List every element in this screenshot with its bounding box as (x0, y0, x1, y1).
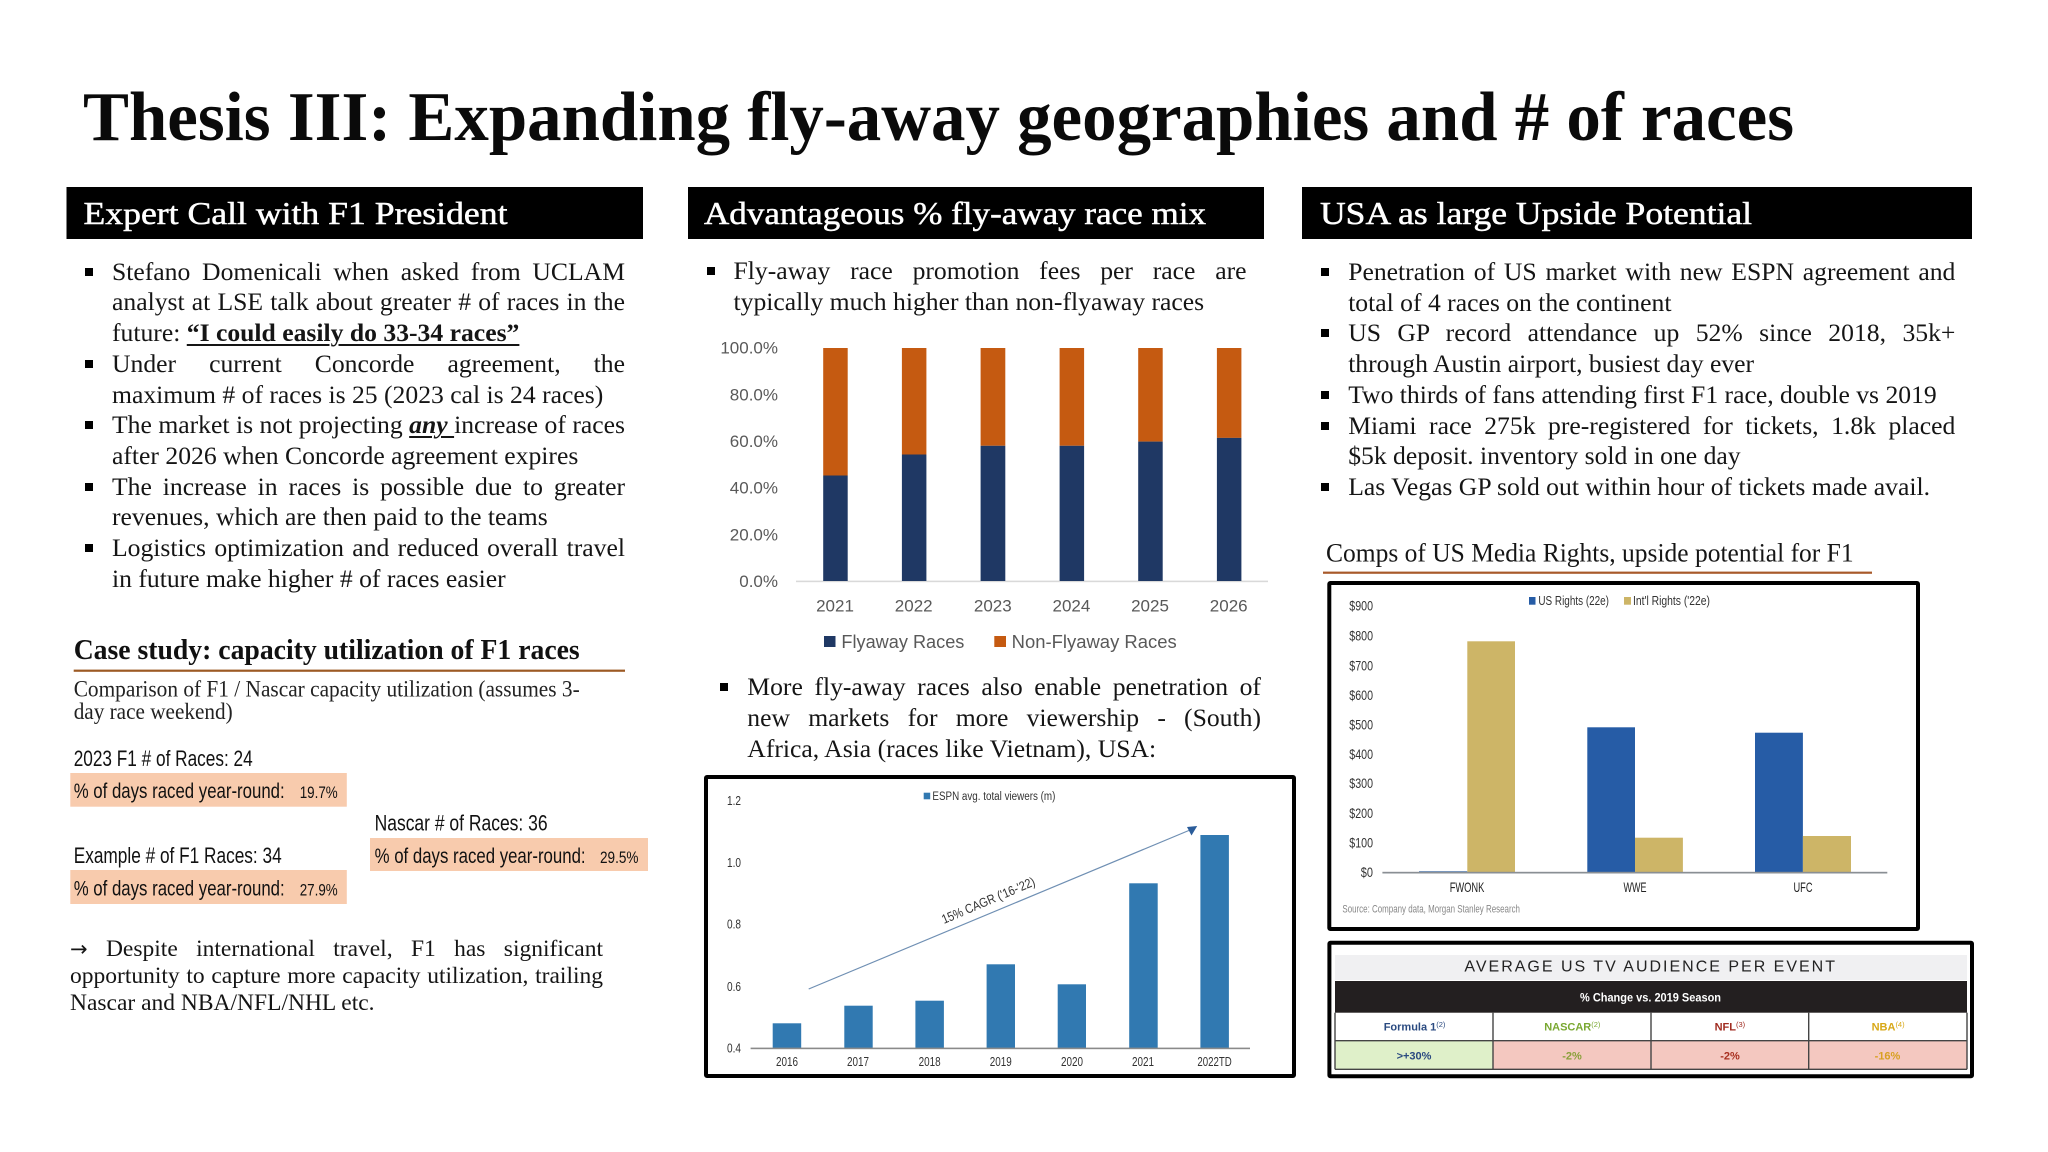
y axis labels: 1.0 (727, 856, 741, 870)
panel heading: USA as large Upside Potential: USA as large Upside Potential (1320, 195, 1752, 231)
y axis labels: $500 (1349, 716, 1373, 732)
panel heading: Expert Call with F1 President (66, 187, 643, 239)
x axis labels: 2020 (1061, 1055, 1083, 1069)
values: -2% (1720, 1050, 1740, 1062)
text block: expert call bullets: analyst at LSE talk about greater # of races in the (112, 287, 625, 316)
callout: capacity utilization conclusion (70, 936, 603, 1016)
panel heading: Advantageous % fly-away race mix (688, 187, 1264, 239)
x axis labels (816, 597, 1248, 616)
y axis labels: 0.6 (727, 980, 741, 994)
bar chart: ESPN average total viewers (706, 777, 1294, 1076)
y axis labels: $700 (1349, 658, 1373, 674)
y axis labels: $900 (1349, 598, 1373, 614)
y axis labels: $0 (1361, 864, 1373, 880)
text block: expert call bullets: Under current Concorde agreement, the (112, 349, 625, 378)
y axis labels: 40.0% (730, 479, 778, 498)
comps heading: Comps of US Media Rights, upside potential for F1 (1326, 539, 1854, 568)
x axis labels: 2023 (974, 597, 1012, 616)
y axis labels: $100 (1349, 834, 1373, 850)
text block: USA upside bullets: Penetration of US market with new ESPN agreement and (1348, 257, 1955, 286)
bar chart: US media rights comps (1329, 583, 1918, 929)
stat: example F1 races: Example # of F1 Races: 34 (74, 843, 282, 868)
y axis labels: 0.8 (727, 917, 741, 931)
stat: example F1 races: % of days raced year-round: (74, 877, 285, 900)
x axis labels (776, 1055, 1232, 1069)
stat: example F1 races: 27.9% (300, 880, 338, 899)
x axis labels: 2018 (919, 1055, 941, 1069)
column headers: (4) (1895, 1020, 1905, 1029)
column headers: NBA (1872, 1022, 1895, 1034)
panel heading: USA as large Upside Potential (1302, 187, 1972, 239)
text block: new markets bullet: More fly-away races also enable penetration of (747, 672, 1261, 701)
bar chart: ESPN average total viewers: ESPN avg. total viewers (m) (932, 791, 1056, 803)
column headers: NFL (1715, 1022, 1736, 1034)
bar chart: US media rights comps: US Rights (22e) (1538, 594, 1609, 608)
x axis labels: UFC (1794, 879, 1812, 895)
CAGR label: 15% CAGR ('16-'22) (939, 874, 1037, 927)
text block: new markets bullet (720, 672, 1261, 763)
x axis labels: 2019 (990, 1055, 1012, 1069)
text block: expert call bullets: revenues, which are then paid to the teams (112, 502, 548, 531)
column headers (1384, 1020, 1905, 1034)
text block: USA upside bullets: total of 4 races on the continent (1348, 288, 1671, 317)
x axis labels: 2022TD (1197, 1055, 1232, 1069)
column headers: Formula 1 (1384, 1022, 1436, 1034)
callout: capacity utilization conclusion: → Despite international travel, F1 has significant (70, 936, 603, 962)
table: average US TV audience per event: AVERAGE US TV AUDIENCE PER EVENT (1464, 958, 1835, 975)
source note: Source: Company data, Morgan Stanley Research (1342, 904, 1520, 916)
x axis labels: FWONK (1450, 879, 1485, 895)
values: >+30% (1397, 1050, 1432, 1062)
x axis labels: 2022 (895, 597, 933, 616)
text block: expert call bullets: maximum # of races is 25 (2023 cal is 24 races) (112, 380, 603, 409)
text block: USA upside bullets (1321, 257, 1955, 501)
y axis labels: 0.0% (739, 572, 778, 591)
stat: Nascar races: Nascar # of Races: 36 (375, 811, 548, 836)
stat: 2023 F1 races (70, 746, 347, 807)
panel heading: Advantageous % fly-away race mix: Advantageous % fly-away race mix (704, 195, 1206, 231)
text block: USA upside bullets: Two thirds of fans attending first F1 race, double vs 2019 (1348, 380, 1937, 409)
legend (924, 793, 930, 799)
values: -2% (1562, 1050, 1582, 1062)
y axis labels: 60.0% (730, 432, 778, 451)
text block: USA upside bullets: Miami race 275k pre-registered for tickets, 1.8k placed (1348, 411, 1955, 440)
text block: fly-away promotion fees bullet: Fly-away race promotion fees per race are (734, 256, 1246, 285)
stat: Nascar races (370, 811, 648, 871)
text block: fly-away promotion fees bullet: typically much higher than non-flyaway races (734, 287, 1204, 316)
stat: example F1 races (70, 843, 347, 904)
y axis labels: 100.0% (720, 339, 778, 358)
y axis labels: $200 (1349, 805, 1373, 821)
text block: expert call bullets: The market is not projecting any increase of races (112, 410, 625, 439)
orange non-flyaway segments (823, 348, 1241, 476)
column headers: (3) (1736, 1020, 1746, 1029)
text block: USA upside bullets: Las Vegas GP sold out within hour of tickets made avail. (1348, 472, 1930, 501)
x axis labels (1450, 879, 1812, 895)
stat: 2023 F1 races: % of days raced year-round: (74, 780, 285, 803)
title: Thesis III: Expanding fly-away geographies and # of races (83, 79, 1794, 156)
gold international rights bars (1467, 641, 1851, 872)
x axis labels: 2025 (1131, 597, 1169, 616)
text block: expert call bullets: Logistics optimization and reduced overall travel (112, 533, 625, 562)
column headers: (2) (1591, 1020, 1601, 1029)
y axis labels: $600 (1349, 687, 1373, 703)
text block: USA upside bullets: US GP record attendance up 52% since 2018, 35k+ (1348, 318, 1955, 347)
table: average US TV audience per event (1329, 943, 1972, 1076)
callout: capacity utilization conclusion: Nascar and NBA/NFL/NHL etc. (70, 990, 375, 1016)
case study description (74, 677, 580, 724)
x axis labels: 2021 (816, 597, 854, 616)
y axis labels (1349, 598, 1373, 880)
stat: Nascar races: 29.5% (600, 848, 638, 867)
y axis labels: $800 (1349, 628, 1373, 644)
x axis labels: WWE (1624, 879, 1646, 895)
x axis labels: 2017 (847, 1055, 869, 1069)
case study heading: Case study: capacity utilization of F1 races (74, 635, 580, 666)
column headers: (2) (1436, 1020, 1446, 1029)
panel heading: Expert Call with F1 President: Expert Call with F1 President (84, 195, 508, 231)
grid (1335, 1013, 1967, 1069)
case study description: day race weekend) (74, 699, 233, 724)
y axis labels: 80.0% (730, 385, 778, 404)
blue US rights bars (1419, 727, 1803, 873)
text block: expert call bullets (85, 257, 625, 593)
stacked bar chart: flyaway vs non-flyaway race mix: Flyaway Races (841, 632, 964, 652)
y axis labels: 1.2 (727, 794, 741, 808)
case study description: Comparison of F1 / Nascar capacity utilization (assumes 3- (74, 677, 580, 702)
table: average US TV audience per event: % Change vs. 2019 Season (1580, 993, 1721, 1005)
text block: new markets bullet: Africa, Asia (races like Vietnam), USA: (747, 734, 1156, 763)
y axis labels (720, 339, 778, 591)
legend (824, 636, 836, 647)
column headers: NASCAR (1544, 1022, 1591, 1034)
stat: 2023 F1 races: 2023 F1 # of Races: 24 (74, 746, 253, 771)
text block: new markets bullet: new markets for more viewership - (South) (747, 703, 1261, 732)
x axis labels: 2026 (1210, 597, 1248, 616)
y axis labels: $400 (1349, 746, 1373, 762)
row 2 fills (1335, 1041, 1493, 1069)
stat: 2023 F1 races: 19.7% (300, 783, 338, 802)
values (1397, 1050, 1901, 1062)
CAGR arrow (809, 826, 1197, 989)
y axis labels: 20.0% (730, 525, 778, 544)
stacked bar chart: flyaway vs non-flyaway race mix: Non-Flyaway Races (1012, 632, 1177, 652)
x axis labels: 2024 (1052, 597, 1090, 616)
stat: Nascar races: % of days raced year-round: (375, 845, 586, 868)
navy flyaway segments (823, 438, 1241, 581)
text block: USA upside bullets: through Austin airport, busiest day ever (1348, 349, 1754, 378)
values: -16% (1875, 1050, 1901, 1062)
x axis labels: 2021 (1132, 1055, 1154, 1069)
text block: expert call bullets: future: “I could easily do 33-34 races” (112, 318, 519, 347)
text block: expert call bullets: The increase in races is possible due to greater (112, 472, 625, 501)
bar chart: US media rights comps: Int'l Rights ('22e) (1633, 594, 1710, 608)
text block: expert call bullets: after 2026 when Concorde agreement expires (112, 441, 578, 470)
y axis labels: 0.4 (727, 1042, 741, 1056)
callout: capacity utilization conclusion: opportunity to capture more capacity utilization, trailing (70, 963, 603, 989)
legend (1529, 597, 1536, 605)
text block: USA upside bullets: $5k deposit. inventory sold in one day (1348, 441, 1741, 470)
text block: expert call bullets: Stefano Domenicali when asked from UCLAM (112, 257, 625, 286)
text block: expert call bullets: in future make higher # of races easier (112, 564, 506, 593)
y axis labels: $300 (1349, 775, 1373, 791)
text block: fly-away promotion fees bullet (707, 256, 1246, 316)
y axis labels (727, 794, 741, 1056)
stacked bar chart: flyaway vs non-flyaway race mix (720, 339, 1268, 652)
x axis labels: 2016 (776, 1055, 798, 1069)
bars (773, 835, 1229, 1048)
